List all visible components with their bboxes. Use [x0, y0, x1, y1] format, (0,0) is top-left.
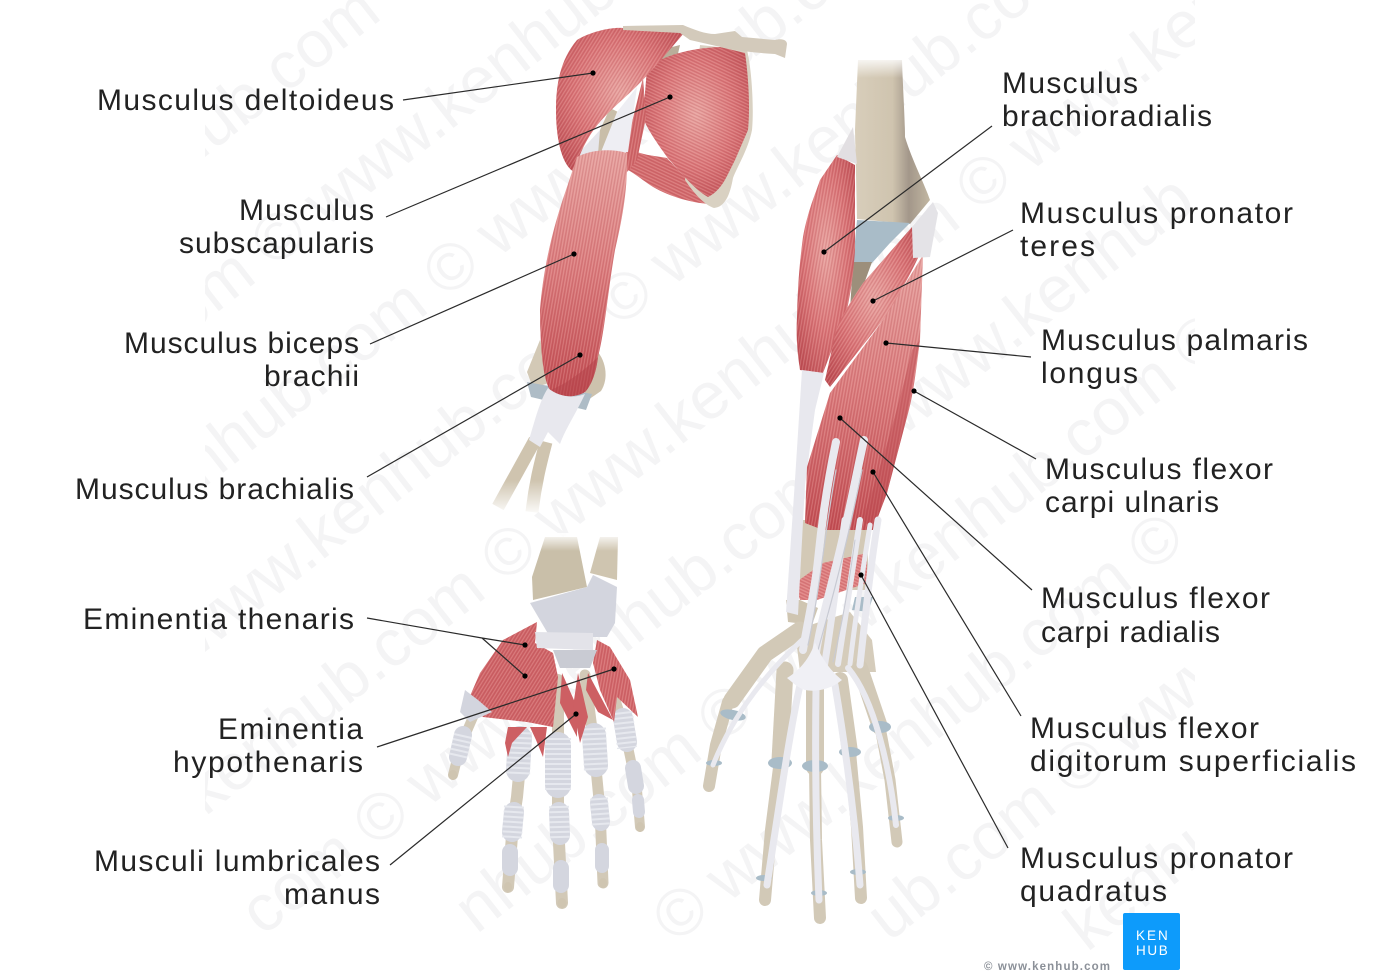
joint cartilage: [706, 707, 904, 896]
watermark: © www.kenhub.com ©: [638, 497, 1197, 956]
label: Musculus pronator quadratus: Musculus pronator: [1020, 842, 1293, 875]
copyright: © www.kenhub.com: [984, 961, 1110, 973]
illustration: shoulder and upper arm: [498, 25, 787, 512]
label: Musculus flexor carpi ulnaris: Musculus flexor: [1045, 453, 1273, 486]
watermark: ub.com © www: [852, 621, 1248, 954]
tendon: distal biceps: [529, 388, 585, 447]
label: Musculus subscapularis: subscapularis: [179, 227, 374, 260]
muscles: lumbricals: [505, 673, 613, 757]
label: Musculus flexor digitorum superficialis: Musculus flexor: [1030, 712, 1259, 745]
label: Musculus flexor carpi ulnaris: carpi ulnaris: [1045, 486, 1219, 519]
muscle: coracobrachialis: [622, 78, 646, 178]
label: Musculi lumbricales manus: Musculi lumbricales: [94, 845, 380, 878]
label: Musculus pronator quadratus: [858, 572, 1293, 908]
illustration: anterior forearm: [706, 56, 938, 918]
label: Musculus palmaris longus: [883, 324, 1308, 390]
muscle: hypothenar eminence: [593, 640, 638, 722]
ligaments: wrist: [530, 575, 617, 637]
label: Eminentia hypothenaris: Eminentia: [218, 713, 363, 746]
illustration: palmar hand: [448, 533, 644, 908]
label: Musculus brachialis: Musculus brachialis: [75, 473, 354, 506]
muscle: pronator teres: [825, 227, 923, 387]
label: Musculus pronator teres: teres: [1020, 230, 1095, 263]
label: Musculus deltoideus: Musculus deltoideus: [97, 84, 394, 117]
logo: Kenhub: KEN: [1136, 928, 1170, 943]
muscle: biceps brachii: [540, 150, 627, 396]
tendons: long flexors at wrist and fingers: [713, 440, 896, 900]
muscle: thenar eminence: [460, 622, 558, 727]
bone: clavicle: [623, 25, 787, 58]
label: Musculus palmaris longus: longus: [1041, 357, 1138, 390]
bone: humerus and elbow: [850, 56, 930, 310]
label: Musculus pronator quadratus: quadratus: [1020, 875, 1167, 908]
finger skeleton and sheaths: [453, 675, 640, 903]
bones: radius, ulna and carpals: [786, 520, 876, 672]
watermark: com © www.kenhub.com © www.kenhub.com: [226, 71, 1319, 948]
label: Musculus biceps brachii: [124, 251, 577, 393]
label: Musculus brachialis: [75, 352, 583, 506]
logo: Kenhub: HUB: [1136, 943, 1169, 958]
tendon: common flexor origin: [912, 202, 938, 258]
metacarpal heads and carpal region: [553, 650, 597, 668]
label: Musculi lumbricales manus: [94, 711, 579, 911]
label: Musculus pronator teres: [870, 197, 1293, 304]
muscle: deltoid: [556, 28, 684, 172]
hand bones: thumb and fingers: [709, 630, 897, 918]
logo: Kenhub: [1123, 913, 1180, 970]
bones: distal radius and ulna: [530, 533, 622, 600]
label: Musculus flexor digitorum superficialis: digitorum superficialis: [1030, 745, 1356, 778]
muscle: teres: [628, 152, 710, 204]
label: Musculus brachioradialis: [821, 67, 1212, 255]
palmar aponeurosis: [787, 642, 842, 691]
label: Musculus flexor carpi ulnaris: [911, 388, 1273, 519]
label: Musculus flexor digitorum superficialis: [870, 469, 1356, 778]
label: Musculus palmaris longus: Musculus palmaris: [1041, 324, 1308, 357]
bones: radius and ulna: [498, 45, 680, 512]
ligament: flexor retinaculum: [535, 632, 593, 650]
label: Musculus pronator teres: Musculus pronator: [1020, 197, 1293, 230]
tendon: brachioradialis origin: [837, 127, 857, 164]
label: Musculus biceps brachii: brachii: [264, 360, 359, 393]
label: Musculus subscapularis: [179, 94, 673, 260]
label: Eminentia thenaris: [83, 603, 528, 679]
label: Musculus flexor carpi radialis: [837, 415, 1270, 649]
label: Musculus deltoideus: [97, 70, 596, 117]
label: Eminentia thenaris: Eminentia thenaris: [83, 603, 354, 636]
label: Eminentia hypothenaris: hypothenaris: [173, 746, 363, 779]
bone: scapula: [685, 45, 753, 208]
muscle: pronator quadratus: [795, 553, 867, 600]
fingertips: [448, 770, 644, 908]
label: Musculus brachioradialis: Musculus: [1002, 67, 1138, 100]
label: Musculus brachioradialis: brachioradialis: [1002, 100, 1212, 133]
label: Musculi lumbricales manus: manus: [284, 878, 380, 911]
muscle: superficial flexor group: [805, 255, 923, 530]
tendon: brachioradialis insertion: [786, 370, 824, 615]
muscle: brachioradialis: [797, 155, 855, 373]
label: Eminentia hypothenaris: [173, 666, 617, 779]
watermark: nhub.com © www.kenhub.com ©: [440, 297, 1241, 946]
muscle: subscapularis: [643, 47, 749, 197]
tendons: biceps long and short heads: [576, 87, 637, 156]
label: Musculus flexor carpi radialis: Musculus flexor: [1041, 582, 1270, 615]
label: Musculus flexor carpi radialis: carpi radialis: [1041, 616, 1220, 649]
watermark: kenhub: [1050, 772, 1266, 964]
label: Musculus subscapularis: Musculus: [239, 194, 374, 227]
label: Musculus biceps brachii: Musculus biceps: [124, 327, 359, 360]
